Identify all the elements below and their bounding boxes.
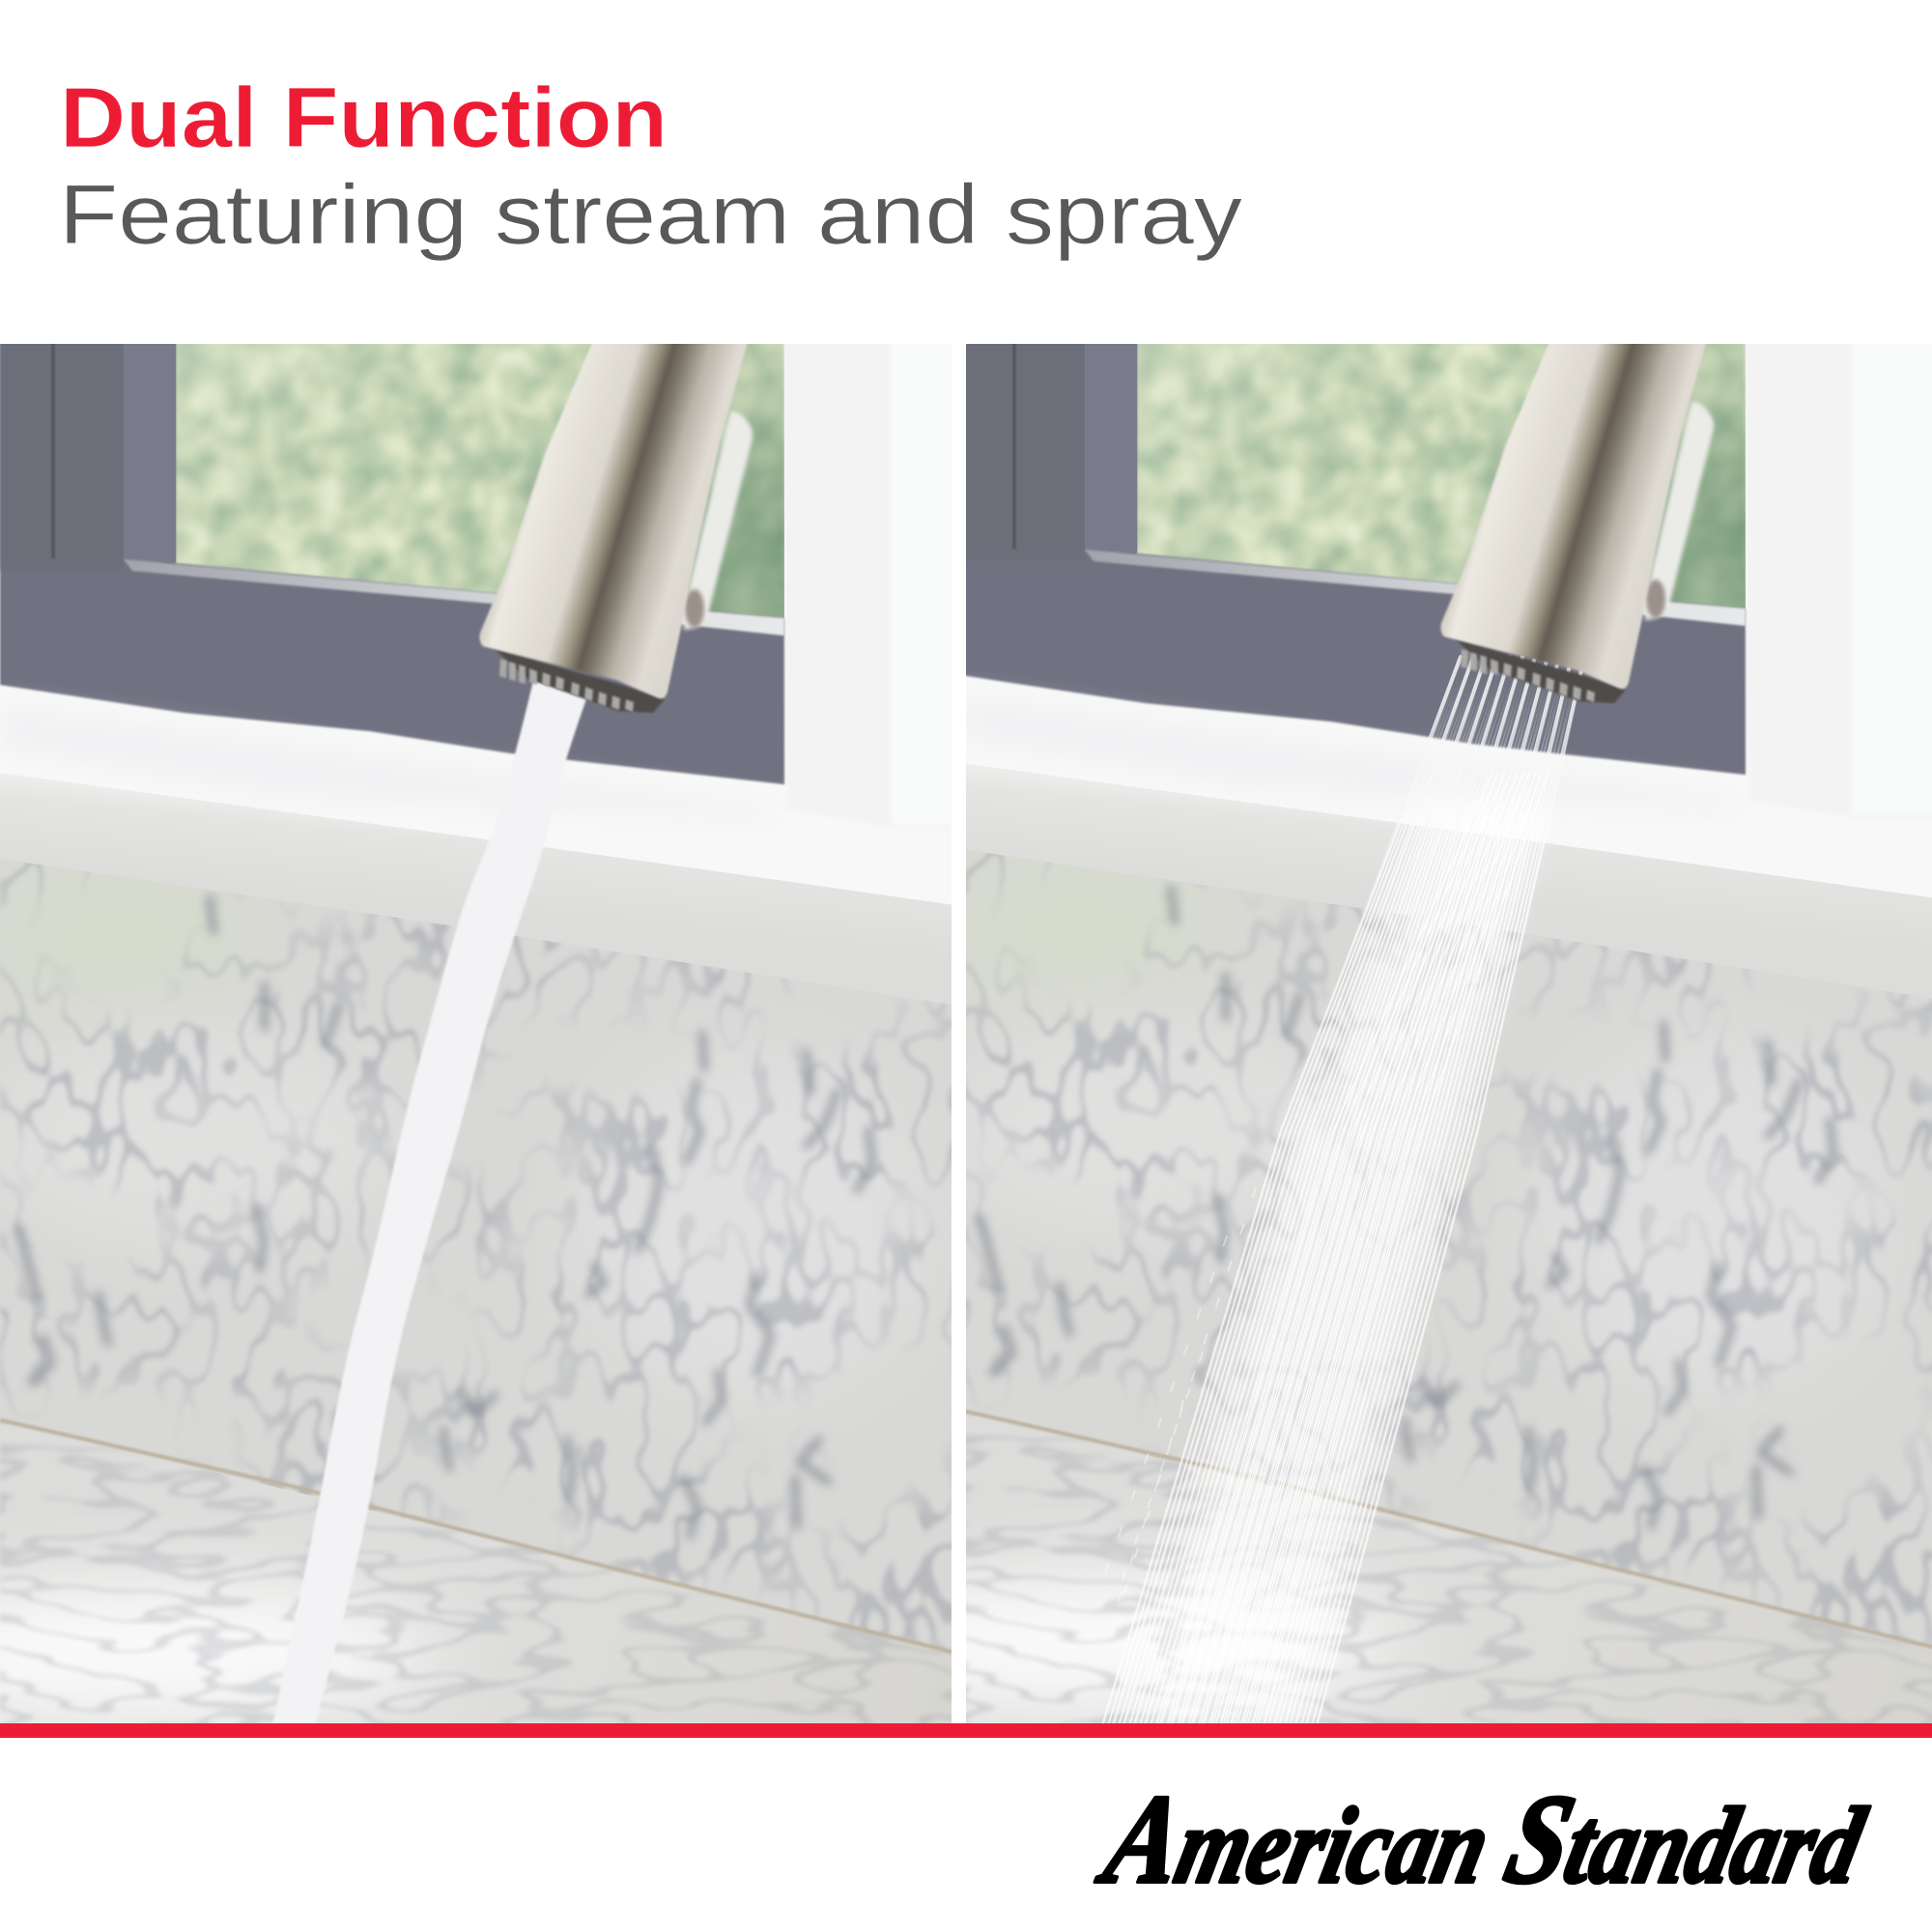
title	[59, 70, 1243, 262]
ledge shading	[961, 763, 1932, 1005]
water stream	[271, 681, 589, 1729]
water spray haze	[1140, 802, 1546, 1729]
spray droplets at left edge	[1101, 1188, 1256, 1642]
window and wall scene	[0, 338, 978, 1739]
window and wall scene	[816, 328, 1932, 1729]
faucet nozzle	[1456, 639, 1626, 703]
dark window frame	[961, 328, 1746, 775]
spray streams: thick near nozzle	[1345, 657, 1584, 966]
marble wall	[932, 840, 1932, 1662]
logo: American Standard: American Standard	[1089, 1769, 1880, 1910]
marble counter	[816, 1401, 1932, 1729]
faucet body	[479, 338, 749, 698]
window glass with foliage	[164, 338, 792, 628]
dark window frame	[0, 338, 784, 784]
faucet button	[684, 412, 753, 630]
marble counter	[0, 1410, 976, 1739]
panel: stream photo	[0, 338, 978, 1739]
spray streams: thin	[1107, 667, 1581, 1729]
faucet body	[1440, 328, 1710, 689]
white window post	[1746, 328, 1932, 817]
nozzle teeth	[1461, 649, 1595, 702]
faucet button	[1645, 402, 1714, 620]
window sill strip	[124, 559, 784, 636]
marble veins	[980, 889, 1833, 1526]
panel: spray photo	[816, 328, 1932, 1729]
nozzle teeth	[499, 659, 634, 712]
window sill strip	[1085, 550, 1746, 626]
marble wall	[0, 850, 976, 1671]
subheading: Featuring stream and spray: Featuring stream and spray	[59, 168, 1243, 262]
spray streams: fine core	[1158, 773, 1548, 1729]
faucet nozzle	[495, 649, 665, 713]
red divider bar	[0, 1723, 1932, 1738]
heading: Dual Function: Dual Function	[60, 70, 668, 165]
marble veins	[18, 898, 872, 1536]
counter backsplash line	[0, 1420, 976, 1658]
spray streams: thick	[1101, 667, 1584, 1729]
water spray	[1101, 657, 1584, 1729]
counter backsplash line	[961, 1410, 1932, 1648]
ledge shading	[0, 773, 976, 1014]
window glass with foliage	[1125, 328, 1753, 618]
white window post	[782, 344, 784, 618]
